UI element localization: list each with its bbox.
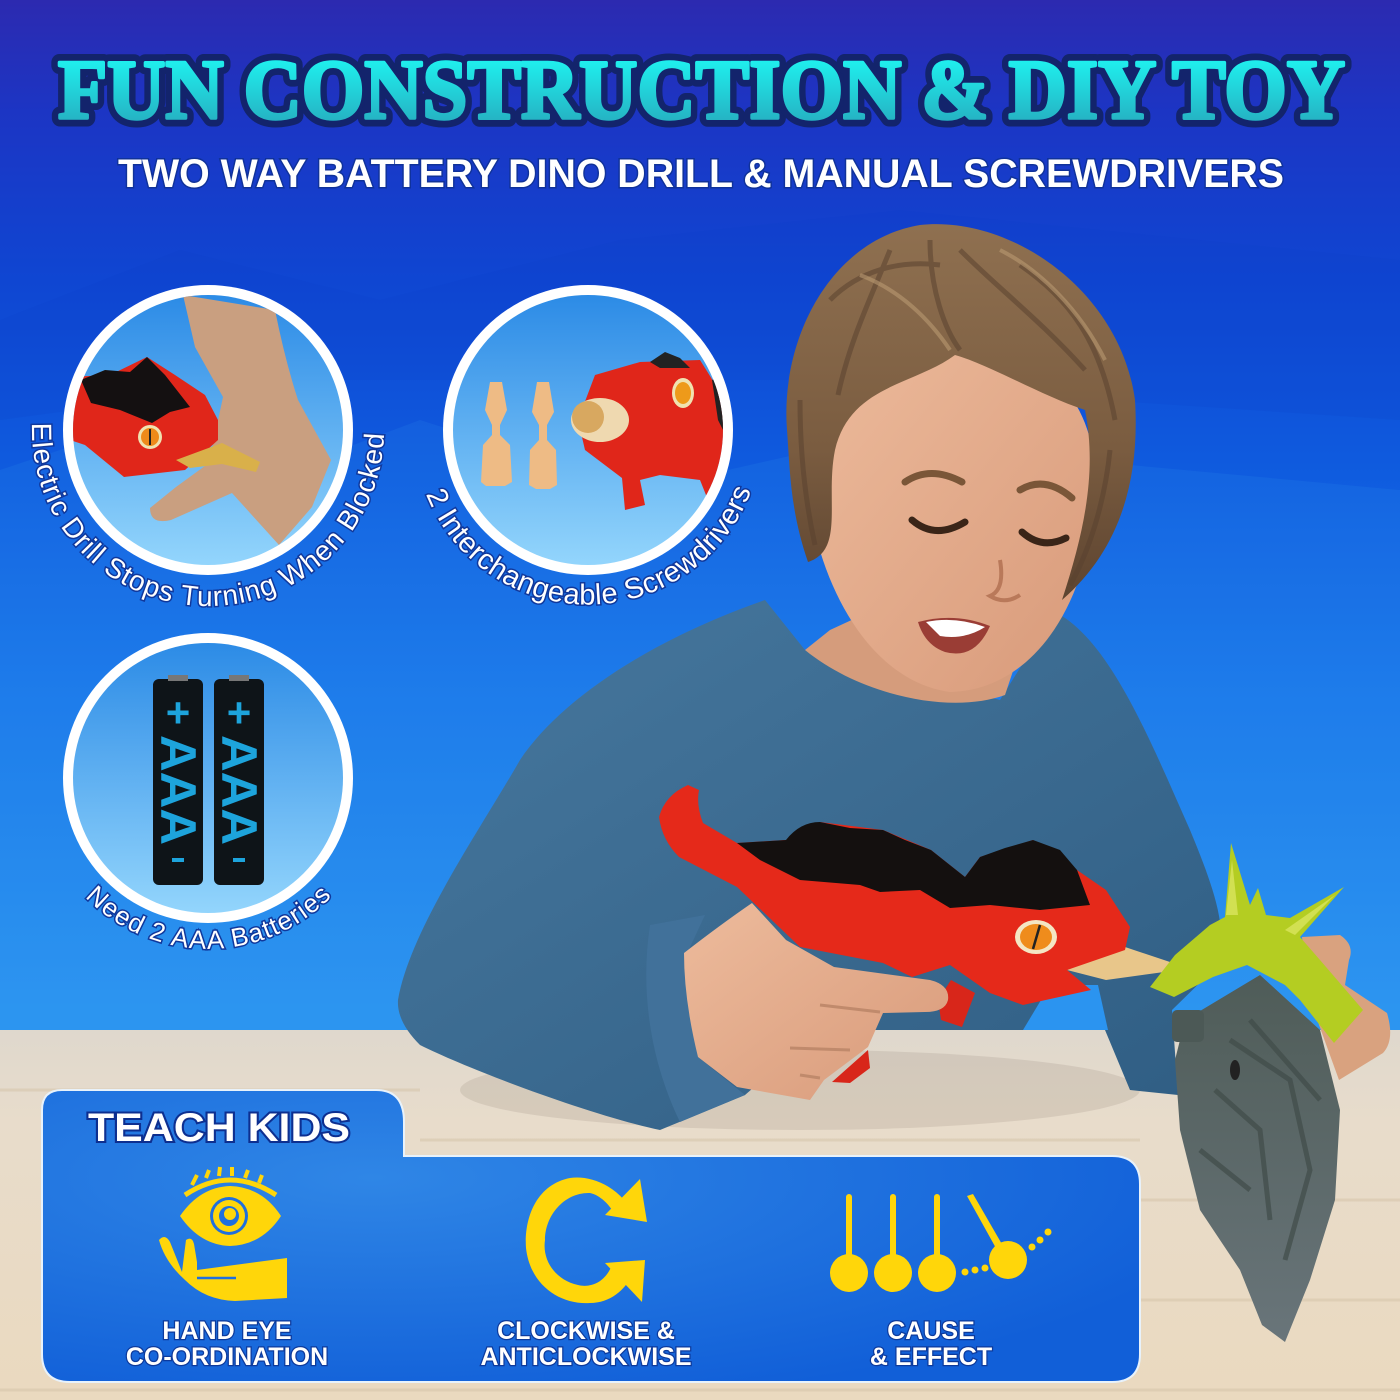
black crest: [737, 822, 1090, 910]
feature circle: screwdrivers: [443, 285, 733, 575]
icon: pendulums: [830, 1194, 1052, 1292]
label: screwdrivers: 2 Interchangeable Screwdrivers: [424, 486, 752, 606]
hair strands: [800, 240, 1115, 585]
AAA battery right: AAA: [211, 735, 267, 845]
dino eye: [1015, 920, 1057, 954]
face: [805, 335, 1095, 692]
hand blocking the drill: [150, 295, 331, 545]
table top: [0, 1030, 1400, 1400]
grey dino toy: [1172, 975, 1340, 1342]
panel: teach kids: [42, 1090, 1140, 1382]
red dino drill: [659, 785, 1170, 1027]
label: cause and effect: & EFFECT: [870, 1343, 992, 1371]
closed eyes: [912, 520, 1066, 543]
label: clockwise: ANTICLOCKWISE: [480, 1343, 692, 1371]
eyebrows: [905, 474, 1072, 498]
sweater body and arms: [398, 600, 1221, 1130]
black crest: [81, 357, 190, 423]
title: FUN CONSTRUCTION & DIY TOY: [58, 43, 1345, 137]
nose: [990, 560, 1020, 600]
label: electric drill: Electric Drill Stops Turning When Blocked: [30, 423, 386, 608]
feature circle: drill stops when blocked: [63, 285, 353, 575]
label: cause and effect: CAUSE: [887, 1317, 975, 1345]
icon: rotation arrows: [526, 1177, 647, 1303]
feature circle: batteries: [63, 633, 353, 923]
hair: [786, 224, 1136, 600]
flat screwdriver bit: [481, 382, 512, 486]
socket mouth: [571, 398, 629, 442]
red dino foot: [832, 1050, 870, 1083]
back leg: [938, 980, 975, 1027]
AAA battery left: [150, 675, 206, 885]
neck: [805, 570, 1030, 703]
cross screwdriver bit: [529, 382, 557, 489]
title: FUN CONSTRUCTION & DIY TOY: [58, 43, 1345, 137]
drill bit: [176, 443, 260, 472]
left sleeve cuff: [646, 915, 745, 1122]
drill bit: [1067, 947, 1170, 980]
label: batteries: Need 2 AAA Batteries: [84, 883, 332, 951]
label: hand eye: CO-ORDINATION: [126, 1343, 328, 1371]
sky gap between body and right arm: [1023, 985, 1108, 1030]
red dino head with socket: [578, 360, 725, 510]
smile: [918, 618, 990, 654]
panel background: [42, 1090, 1140, 1382]
subtitle: TWO WAY BATTERY DINO DRILL & MANUAL SCREWDRIVERS: [118, 152, 1284, 196]
dino eye: [138, 425, 162, 449]
red dino head: [70, 357, 218, 477]
AAA battery right: [211, 675, 267, 885]
label: hand eye: HAND EYE: [162, 1317, 292, 1345]
green frill with horns: [1150, 843, 1363, 1043]
boy's hand on drill: [684, 903, 948, 1100]
AAA battery left: +: [166, 689, 190, 736]
right hand behind the toy: [1302, 935, 1390, 1080]
icon: eye over hand: [159, 1167, 287, 1301]
panel heading: TEACH KIDS: [88, 1106, 350, 1150]
dino body: [659, 785, 1130, 1005]
AAA battery left: AAA: [150, 735, 206, 845]
label: clockwise: CLOCKWISE &: [497, 1317, 675, 1345]
boy: [398, 224, 1221, 1130]
dino eye: [672, 378, 694, 408]
AAA battery right: +: [227, 689, 251, 736]
dark spikes: [650, 352, 723, 430]
